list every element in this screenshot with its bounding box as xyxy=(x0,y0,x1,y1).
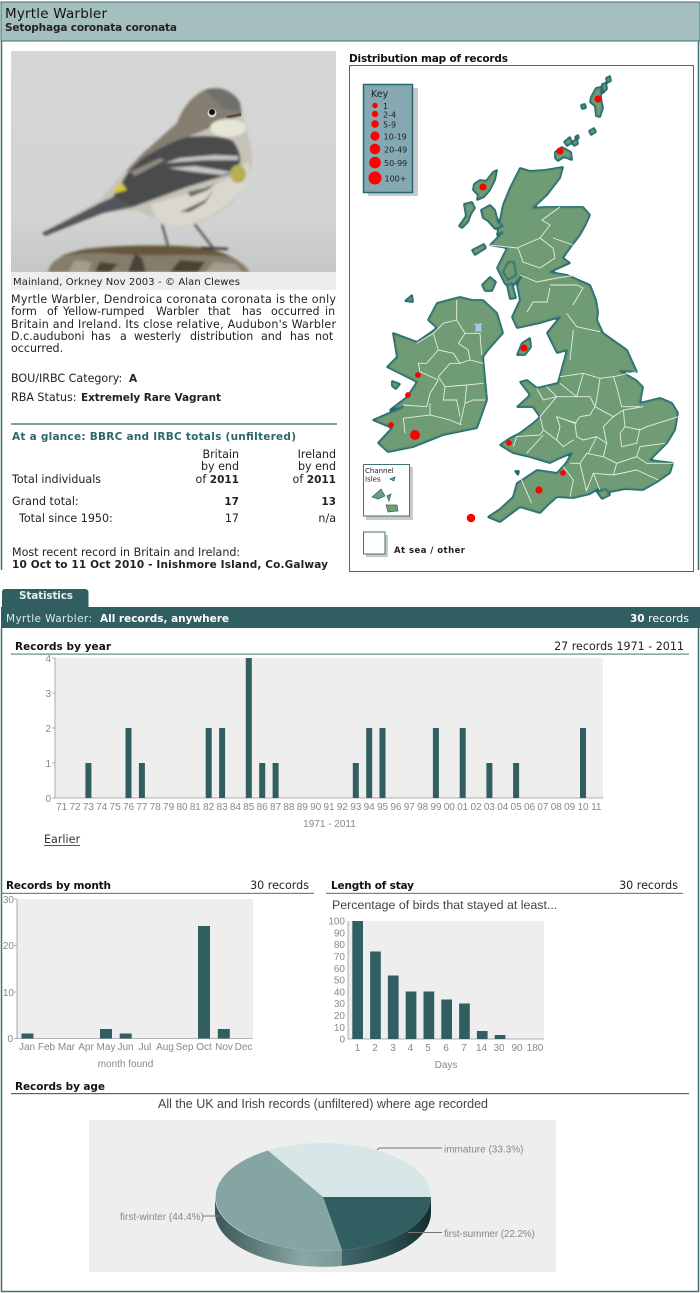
bar chart: length of stay: 30 xyxy=(493,1043,505,1054)
slice: first-summer xyxy=(323,1197,431,1250)
Great Britain xyxy=(488,167,678,522)
species description xyxy=(11,293,336,355)
bar chart: records by year: 1971 - 2011 xyxy=(303,819,356,830)
at a glance table: Ireland xyxy=(298,448,336,461)
bar chart: records by year: 3 xyxy=(45,689,51,700)
bar chart: length of stay: 40 xyxy=(334,988,345,998)
throat xyxy=(210,119,246,137)
bar chart: records by month: Sep xyxy=(176,1042,194,1053)
bar chart: length of stay: 90 xyxy=(511,1043,523,1054)
slice: first-winter xyxy=(216,1150,342,1251)
pie chart title: All the UK and Irish records (unfiltered) where age recorded xyxy=(158,1097,488,1111)
bar chart: records by year: 73 xyxy=(83,802,94,813)
Uists xyxy=(459,202,475,228)
map key: 5-9 xyxy=(383,120,396,130)
at a glance table: Grand total: xyxy=(12,495,79,508)
statistics bar xyxy=(1,607,700,628)
bar chart: records by month: 20 xyxy=(3,941,14,952)
at a glance table xyxy=(11,423,337,525)
bar chart: length of stay: 2 xyxy=(372,1043,378,1054)
bar chart: records by year: 02 xyxy=(470,802,482,813)
label: immature: immature (33.3%) xyxy=(444,1144,523,1156)
species description: has xyxy=(91,330,111,343)
species description: occurred. xyxy=(11,342,63,355)
pie chart: records by age xyxy=(89,1120,556,1272)
bar chart: length of stay: 1 xyxy=(355,1043,361,1054)
heading: length of stay: Length of stay xyxy=(331,880,414,892)
at a glance table: by end xyxy=(298,460,336,473)
species description: and xyxy=(261,330,282,343)
land: Great Britain and Ireland xyxy=(373,76,678,522)
at a glance table: Britain xyxy=(202,448,239,461)
heading: length of stay xyxy=(326,879,683,894)
species description: that xyxy=(208,305,231,318)
at a glance table: Total since 1950: xyxy=(18,512,113,525)
at a glance table: of 2011 xyxy=(293,473,336,486)
Skye xyxy=(481,205,503,229)
most recent record xyxy=(12,546,328,571)
bar chart: records by year: 05 xyxy=(511,802,522,813)
statistics bar: Myrtle Warbler: xyxy=(6,613,92,625)
species description: form xyxy=(11,305,37,318)
Isle of Man xyxy=(517,338,531,355)
map key: 1 xyxy=(383,102,388,111)
slice: immature xyxy=(268,1143,431,1197)
bar chart: records by year: 80 xyxy=(176,802,188,813)
label: first-summer: first-summer (22.2%) xyxy=(444,1229,535,1240)
head and back xyxy=(125,88,242,172)
bar chart: records by year: 96 xyxy=(390,802,402,813)
bar chart: length of stay: 14 xyxy=(476,1043,487,1054)
bar chart: length of stay: 5 xyxy=(425,1043,431,1054)
status lines: A xyxy=(129,373,138,385)
at a glance table: of 2011 xyxy=(196,473,239,486)
map key: Key xyxy=(371,89,389,100)
heading: records by month xyxy=(2,879,314,894)
bar chart: records by year xyxy=(45,654,603,830)
bar chart: records by year: 06 xyxy=(524,802,535,813)
bar chart: records by year: 97 xyxy=(404,802,415,813)
species description: has xyxy=(290,330,310,343)
Wight xyxy=(597,489,610,499)
most recent record: Most recent record in Britain and Ireland: xyxy=(12,546,240,559)
photo: warbler on post xyxy=(11,51,336,272)
bar chart: records by year: 77 xyxy=(136,802,148,813)
species description: Britain and Ireland. Its close relative, Audubon's Warbler xyxy=(11,318,336,331)
at a glance table: Total individuals xyxy=(11,473,101,486)
Ireland xyxy=(373,297,503,452)
statistics tab: Statistics xyxy=(19,590,73,602)
species description: has xyxy=(242,305,262,318)
bar chart: records by month: Jan xyxy=(19,1042,35,1053)
bar chart: records by month: 30 xyxy=(3,895,14,906)
bar chart: records by year: 71 xyxy=(56,802,68,813)
bar chart: records by month: 10 xyxy=(3,988,14,999)
most recent record: 10 Oct to 11 Oct 2010 - Inishmore Island, Co.Galway xyxy=(12,559,328,571)
bar chart: records by year: 83 xyxy=(217,802,228,813)
bar chart: length of stay: 70 xyxy=(334,952,345,963)
at a glance table: 17 xyxy=(224,496,239,508)
bar chart: records by month: May xyxy=(97,1042,115,1053)
bar chart: records by year: 11 xyxy=(591,802,602,813)
link: earlier: Earlier xyxy=(44,833,80,846)
map key: 20-49 xyxy=(384,146,407,154)
bar chart: records by month: Feb xyxy=(38,1042,56,1053)
bar chart: records by year: 91 xyxy=(323,802,335,813)
bar chart: records by year: 89 xyxy=(297,802,308,813)
bar chart: records by year: 94 xyxy=(364,802,375,813)
photo caption xyxy=(11,272,336,290)
Shetland xyxy=(590,87,603,117)
Lewis and Harris xyxy=(473,170,497,200)
bar chart: records by year: 88 xyxy=(283,802,295,813)
header band xyxy=(1,2,700,41)
heading: records by month: Records by month xyxy=(6,880,111,892)
heading: records by year xyxy=(11,640,689,655)
bar chart: records by year: 81 xyxy=(190,802,201,813)
bar chart: records by year: 09 xyxy=(564,802,576,813)
species description: D.c.auduboni xyxy=(11,330,85,343)
bar chart: records by year: 93 xyxy=(350,802,362,813)
statistics bar: 30 records xyxy=(630,612,689,625)
map key: 50-99 xyxy=(384,159,407,168)
bar chart: length of stay: Days xyxy=(435,1060,457,1071)
bar chart: records by month xyxy=(3,895,253,1070)
bar chart: length of stay: 0 xyxy=(339,1034,345,1046)
yellow patches xyxy=(230,165,246,183)
bar chart: records by year: 82 xyxy=(203,802,215,813)
bar chart: records by month: month found xyxy=(98,1059,153,1070)
bar chart: records by month: Dec xyxy=(235,1042,252,1053)
bar chart: records by month: Nov xyxy=(215,1042,233,1053)
heading: length of stay: 30 records xyxy=(619,879,678,892)
bar chart: records by year: 0 xyxy=(45,794,51,805)
bar chart: records by year: 1 xyxy=(45,759,51,770)
heading: records by month: 30 records xyxy=(250,879,309,892)
at sea box xyxy=(364,532,466,557)
bar chart: records by year: 07 xyxy=(537,802,549,813)
heading: records by year: Records by year xyxy=(15,641,112,653)
bar chart: length of stay: 50 xyxy=(334,976,345,986)
species description: Myrtle Warbler, Dendroica coronata coronata is the only xyxy=(11,293,336,306)
heading: records by age: Records by age xyxy=(15,1081,105,1093)
Channel Isles inset xyxy=(364,464,413,520)
bar chart: records by year: 01 xyxy=(457,802,469,813)
bar chart: length of stay: 30 xyxy=(334,999,345,1010)
label: first-winter: first-winter (44.4%) xyxy=(120,1212,204,1223)
map heading: Distribution map of records xyxy=(349,53,508,65)
bar chart: length of stay: 90 xyxy=(334,928,345,940)
statistics bar: All records, anywhere xyxy=(100,613,229,625)
species description: occurred xyxy=(271,305,320,318)
statistics tab xyxy=(2,589,88,607)
bar chart: records by year: 04 xyxy=(497,802,509,813)
body xyxy=(42,88,252,236)
bar chart: records by month: Aug xyxy=(156,1042,174,1053)
species description: Yellow-rumped xyxy=(62,305,144,318)
bar chart: records by month: 0 xyxy=(7,1034,13,1045)
bar chart: records by month: Jun xyxy=(117,1042,134,1053)
photo caption: Mainland, Orkney Nov 2003 - © Alan Clewes xyxy=(13,277,240,288)
subtitle: Setophaga coronata coronata xyxy=(5,22,177,34)
at a glance table: 17 xyxy=(225,512,239,525)
bar chart: length of stay: 7 xyxy=(461,1043,467,1054)
bar chart: records by year: 86 xyxy=(257,802,268,813)
bar chart: records by month: Mar xyxy=(58,1042,76,1053)
status lines: Extremely Rare Vagrant xyxy=(81,392,221,404)
rock post xyxy=(48,245,250,272)
bar chart: records by month: Oct xyxy=(196,1042,212,1053)
heading: records by year: 27 records 1971 - 2011 xyxy=(554,640,684,653)
county boundaries: Scotland xyxy=(490,207,583,312)
bar chart: length of stay: 6 xyxy=(443,1043,449,1054)
bar chart: length of stay xyxy=(328,916,544,1071)
map key xyxy=(364,84,418,196)
bar chart: records by year: 84 xyxy=(230,802,241,813)
Channel Isles inset: Channel xyxy=(365,467,394,475)
status lines xyxy=(11,372,221,404)
bar chart: records by year: 95 xyxy=(377,802,388,813)
bar chart: records by year: 76 xyxy=(123,802,134,813)
county boundaries: England, Wales and Ireland xyxy=(403,300,678,503)
bar chart: records by year: 79 xyxy=(163,802,175,813)
species description: distribution xyxy=(190,330,253,343)
bar chart: length of stay: 10 xyxy=(334,1023,345,1034)
at a glance table: by end xyxy=(201,460,239,473)
species description: of xyxy=(47,305,59,318)
chart subtitle: Percentage of birds that stayed at least... xyxy=(332,898,557,912)
bar chart: records by year: 08 xyxy=(551,802,562,813)
at a glance table: 13 xyxy=(321,496,336,508)
species description: not xyxy=(315,330,334,343)
status lines: RBA Status: xyxy=(11,391,77,404)
bar chart: records by month: Jul xyxy=(139,1042,151,1053)
wing xyxy=(113,136,240,207)
status lines: BOU/IRBC Category: xyxy=(11,372,122,385)
map key: 2-4 xyxy=(383,110,396,120)
bar chart: length of stay: 100 xyxy=(328,916,345,928)
bar chart: records by year: 03 xyxy=(484,802,495,813)
at a glance table: n/a xyxy=(318,512,336,525)
bar chart: records by year: 00 xyxy=(444,802,455,813)
Lough Neagh xyxy=(474,323,482,332)
bar chart: records by year: 99 xyxy=(430,802,442,813)
map key: 10-19 xyxy=(384,132,407,142)
bar chart: records by year: 72 xyxy=(69,802,81,813)
map key: 100+ xyxy=(384,174,406,184)
eye and bill xyxy=(208,108,216,118)
legs xyxy=(162,222,213,248)
bar chart: length of stay: 80 xyxy=(334,940,345,951)
bar chart: length of stay: 60 xyxy=(334,964,345,975)
bar chart: records by year: 92 xyxy=(337,802,348,813)
at sea box: At sea / other xyxy=(394,546,466,556)
Orkney xyxy=(555,147,572,161)
bar chart: records by year: 75 xyxy=(110,802,121,813)
species description: Warbler xyxy=(156,305,200,318)
Mull and Islay xyxy=(472,244,486,255)
Channel Isles inset: Isles xyxy=(365,476,381,484)
species description: a xyxy=(120,330,127,343)
bar chart: length of stay: 20 xyxy=(334,1011,345,1022)
bar chart: records by year: 74 xyxy=(96,802,108,813)
bar chart: records by year: 90 xyxy=(310,802,322,813)
bar chart: records by year: 98 xyxy=(417,802,429,813)
bar chart: records by year: 10 xyxy=(577,802,589,813)
bar chart: records by year: 78 xyxy=(150,802,161,813)
record dots xyxy=(388,95,602,522)
panel: distribution map xyxy=(350,66,694,572)
bar chart: length of stay: 4 xyxy=(408,1043,414,1054)
species description: in xyxy=(325,305,335,318)
species description: westerly xyxy=(134,330,181,343)
bar chart: records by year: 2 xyxy=(45,724,51,735)
at a glance table: At a glance: BBRC and IRBC totals (unfiltered) xyxy=(12,431,296,443)
bar chart: records by year: 85 xyxy=(243,802,255,813)
bar chart: length of stay: 3 xyxy=(390,1043,396,1054)
bar chart: records by month: Apr xyxy=(78,1042,94,1053)
title: Myrtle Warbler xyxy=(5,6,107,22)
bar chart: records by year: 4 xyxy=(45,654,51,665)
bar chart: records by year: 87 xyxy=(270,802,282,813)
bar chart: length of stay: 180 xyxy=(527,1043,544,1054)
